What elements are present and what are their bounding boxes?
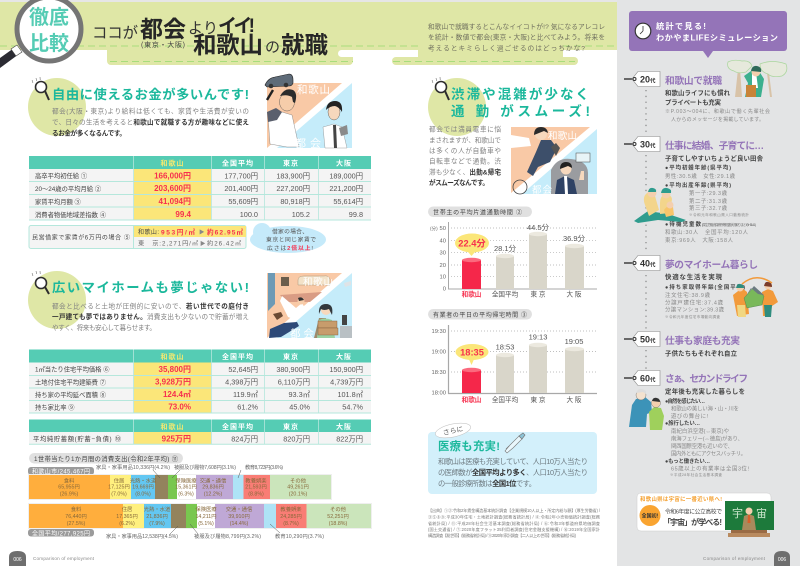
text block: 30s bbox=[665, 139, 764, 244]
bar chart: return home time: 18:00 bbox=[431, 390, 446, 396]
stacked bar: national average: 全国平均/277,925円 bbox=[32, 529, 90, 537]
stacked bar: national average: 76,440円 bbox=[65, 513, 87, 520]
illustration: person on phone with trees bbox=[728, 60, 787, 97]
bar chart: return home time bbox=[431, 325, 597, 404]
bar chart: commute time: 22.4分 bbox=[458, 238, 486, 248]
table: income and rent: 189,000円 bbox=[329, 172, 363, 180]
stacked bar: Wakayama city: 光熱・水道 bbox=[130, 476, 157, 484]
panel: space high school callout: 和歌山県は宇宙に一番近い県へ! bbox=[640, 495, 722, 503]
text block: 30s: 子育てしやすいちょうど良い田舎 bbox=[665, 154, 764, 162]
sidebar heading: 統計で見る! bbox=[656, 21, 706, 31]
stacked bar: Wakayama city: (20.1%) bbox=[289, 492, 308, 498]
footer: left page number: Comparison of employment bbox=[33, 556, 95, 561]
bar chart: commute time: (分) bbox=[430, 225, 438, 232]
stacked bar: national average: (27.5%) bbox=[67, 521, 86, 527]
panel: my home section heading bbox=[28, 271, 249, 329]
text block: 20s bbox=[665, 74, 770, 123]
table: housing: 119.9㎡ bbox=[233, 390, 259, 399]
bar chart: commute time: 10 bbox=[440, 274, 446, 280]
text block: 20s: 和歌山で就職 bbox=[665, 74, 722, 87]
table: housing: 大阪 bbox=[336, 352, 352, 361]
title: 和歌山 bbox=[193, 32, 263, 58]
stacked bar: national average: (7.9%) bbox=[149, 521, 165, 527]
table: income and rent: 消費者物価地域差指数 ④ bbox=[35, 210, 107, 219]
text block: 60s: 65歳以上の有業率は全国3位! bbox=[671, 464, 750, 472]
stacked bar: Wakayama city: 被服及び履物7,608円(3.1%) bbox=[174, 463, 236, 471]
text block: 60s: ●もっと働きたい… bbox=[665, 457, 710, 465]
bar chart: return home time: 東 京 bbox=[530, 395, 546, 404]
illustration: commute comparison bbox=[511, 127, 597, 196]
text block: commute: がスムーズなんです。 bbox=[429, 178, 489, 187]
table: income and rent: 大阪 bbox=[336, 158, 352, 168]
table: income and rent: 80,918円 bbox=[280, 197, 310, 206]
text block: 40s: 夢のマイホーム暮らし bbox=[665, 258, 758, 271]
table: net savings: 平均純貯蓄額(貯蓄−負債) ⑩ bbox=[33, 434, 122, 443]
stacked bar: national average: 保険医療 bbox=[195, 505, 217, 513]
table: income and rent: 99.8 bbox=[349, 210, 363, 219]
table: housing: 持ち家比率 ⑨ bbox=[35, 402, 75, 412]
panel: space high school callout: 全国初! bbox=[642, 512, 659, 520]
text block: my home bbox=[52, 302, 249, 332]
stacked bar: Wakayama city: 家具・家事用品10,336円(4.2%) bbox=[96, 463, 170, 471]
table: income and rent: 105.2 bbox=[292, 210, 310, 219]
stacked bar: national average: 教育10,290円(3.7%) bbox=[275, 532, 324, 540]
text block: 30s: ※令和元年和歌山県人口動態統計 bbox=[689, 212, 749, 217]
table: income and rent: 100.0 bbox=[240, 210, 258, 219]
stacked bar: Wakayama city: その他 bbox=[290, 476, 307, 484]
text block: 60s: ●自然を感じたい… bbox=[665, 397, 705, 405]
table: income and rent bbox=[29, 156, 371, 220]
bar chart: return home time: 大 阪 bbox=[566, 395, 582, 404]
panel: rent floor area comparison: 953円/㎡ bbox=[161, 228, 195, 236]
text block: sources bbox=[428, 507, 601, 538]
bar chart: commute time: 30 bbox=[440, 250, 446, 256]
table: housing: 和歌山 bbox=[160, 352, 184, 361]
stacked bar: Wakayama city: (26.9%) bbox=[60, 492, 79, 498]
intro text: 考えるとキミらしく過ごせるのはどっちかな? bbox=[428, 44, 585, 52]
panel: my home section heading: 広いマイホームも夢じゃない! bbox=[52, 280, 249, 295]
stacked bar: Wakayama city: (12.2%) bbox=[204, 492, 223, 498]
bar chart: return home time: 18:53 bbox=[496, 342, 514, 352]
text block: 30s: ●待機児童数 bbox=[665, 220, 702, 228]
footer: left page number bbox=[9, 551, 95, 566]
table: income and rent: 55,609円 bbox=[228, 197, 258, 206]
table: net savings: 大阪 bbox=[336, 422, 352, 431]
stacked bar: national average: 17,365円 bbox=[116, 513, 138, 520]
text block: 60s: 和歌山の美しい海・山・川を bbox=[671, 404, 739, 412]
stacked bar: Wakayama city: 17,125円 bbox=[108, 484, 130, 491]
panel: rent floor area comparison: 約26.42㎡ bbox=[207, 240, 242, 248]
title: ココが bbox=[92, 24, 138, 42]
illustration: money comparison: 都会 bbox=[295, 137, 321, 150]
text block: 30s: 和歌山:30人 全国平均:120人 bbox=[665, 228, 749, 236]
table: housing: 東京 bbox=[283, 352, 299, 361]
stacked bar: Wakayama city: 29,836円 bbox=[202, 484, 224, 491]
table: housing: 全国平均 bbox=[222, 352, 254, 361]
stacked bar: national average: 教養娯楽 bbox=[280, 505, 302, 513]
bar chart: commute time: 大 阪 bbox=[566, 290, 582, 298]
illustration: elderly couple bbox=[629, 389, 664, 430]
table: housing: 54.7% bbox=[342, 402, 363, 412]
table: net savings: 824万円 bbox=[231, 434, 258, 444]
illustration: family bbox=[634, 188, 686, 223]
text block: sources: 【出典】①②:令和2年賃金構造基本統計調査【企業規模10人以上・所定内給与額】(厚生労働省) / bbox=[428, 507, 601, 513]
text block: 20s: プライベートも充実 bbox=[665, 98, 722, 106]
panel: space high school callout: 宇 bbox=[732, 507, 743, 520]
age tag: 60代: 60代 bbox=[640, 374, 656, 384]
table: income and rent: 99.4 bbox=[175, 210, 192, 219]
table: income and rent: 55,614円 bbox=[333, 197, 363, 206]
bar chart: commute time: 36.9分 bbox=[563, 234, 586, 243]
sidebar heading: わかやまLIFEシミュレーション bbox=[656, 32, 778, 42]
stacked bar: Wakayama city: 19,669円 bbox=[132, 484, 154, 491]
panel: commute section heading: 渋滞や混雑が少なく bbox=[451, 86, 589, 102]
text block: my home: 一戸建ても夢ではありません。消費支出も少ないので貯蓄が増え bbox=[52, 312, 249, 321]
stacked bar: national average: 52,251円 bbox=[327, 513, 349, 520]
table: income and rent: 227,200円 bbox=[276, 184, 310, 193]
text block: commute: は多くの人が自動車や bbox=[429, 146, 501, 155]
text block: my home: やすく、将来も安心して暮らせます。 bbox=[52, 323, 156, 332]
table: housing: 61.2% bbox=[237, 402, 258, 412]
text block: 30s: 第一子:29.3歳 bbox=[689, 189, 728, 197]
panel: medical callout: の一般診療所数は全国1位です。 bbox=[438, 479, 536, 488]
stacked bar: Wakayama city: (7.0%) bbox=[111, 492, 127, 498]
stacked bar: Wakayama city: 65,955円 bbox=[58, 484, 80, 491]
stacked bar: national average: (18.8%) bbox=[329, 521, 348, 527]
title: イイ! bbox=[218, 16, 255, 37]
bar chart: commute time: 44.5分 bbox=[527, 223, 550, 232]
stacked bar: national average: (6.2%) bbox=[119, 521, 135, 527]
stacked bar: Wakayama city: 教養娯楽 bbox=[245, 476, 267, 484]
header band bbox=[0, 2, 623, 65]
text block: 30s: 仕事に結婚、子育てに… bbox=[665, 139, 764, 152]
title: (東京・大阪) bbox=[141, 40, 185, 49]
intro text: を統計・数値で都会(東京・大阪)と比べてみよう。将来を bbox=[428, 32, 605, 42]
panel: space high school callout: 令和6年度に公立高校で bbox=[665, 508, 722, 516]
bar chart: commute time: 20 bbox=[440, 263, 446, 269]
stacked bar: Wakayama city: 21,593円 bbox=[245, 484, 267, 491]
table: housing: 35,800円 bbox=[159, 365, 191, 374]
stacked bar: national average bbox=[28, 503, 372, 540]
illustration: homes comparison: 和歌山 bbox=[303, 277, 333, 288]
stacked bar: national average: (5.1%) bbox=[198, 521, 214, 527]
age tag: 40代 bbox=[624, 256, 660, 270]
illustration: money comparison bbox=[265, 74, 352, 150]
timeline dotted line bbox=[645, 90, 647, 370]
text block: free money bbox=[52, 106, 249, 138]
table: housing: 124.4㎡ bbox=[163, 390, 191, 399]
text block: 60s: 遊びの舞台に! bbox=[671, 412, 708, 420]
text block: free money: で、日々の生活を考えると和歌山で就職する方が趣味などに使え bbox=[52, 118, 249, 126]
bar chart: return home time: 和歌山 bbox=[462, 395, 481, 404]
panel: rent floor area comparison: ▶ bbox=[199, 229, 205, 236]
text block: 50s bbox=[665, 334, 740, 358]
footer: right page number bbox=[703, 551, 790, 566]
text block: 40s: 分譲戸建住宅:37.4歳 bbox=[665, 298, 724, 306]
callout: rent cloud bbox=[250, 223, 326, 253]
text block: 40s: 分譲マンション:39.3歳 bbox=[665, 306, 725, 314]
footer: right page number: Comparison of employment bbox=[703, 556, 766, 561]
illustration: commute comparison: 和歌山 bbox=[548, 131, 577, 142]
table: housing: 150,900円 bbox=[329, 365, 363, 374]
table: housing: 持ち家の平均延べ面積 ⑧ bbox=[35, 390, 107, 399]
panel: rent floor area comparison: 民営借家で家賃が6万円の場合 ⑤ bbox=[32, 234, 130, 242]
table: net savings: 820万円 bbox=[283, 434, 310, 444]
title: 都会 bbox=[140, 16, 186, 42]
text block: 40s: ●持ち家取得年齢(全国平均) bbox=[665, 283, 745, 291]
table: housing: 4,398万円 bbox=[225, 378, 258, 386]
icon: magnifier with 徹底比較 badge: 比較 bbox=[29, 32, 69, 55]
text block: free money: るお金が多くなるんです。 bbox=[52, 128, 126, 138]
illustration: homes comparison: 都会 bbox=[290, 327, 314, 340]
age tag: 20代: 20代 bbox=[640, 74, 656, 84]
text block: 60s bbox=[665, 373, 750, 477]
age tag: 40代: 40代 bbox=[640, 258, 656, 268]
text block: 60s: 南紀白浜空港(⇔東京)や bbox=[671, 427, 729, 435]
panel: free money section heading: 自由に使えるお金が多いんです! bbox=[52, 86, 249, 102]
stacked bar: national average: 被服及び履物8,799円(3.2%) bbox=[194, 532, 261, 540]
heading: return home time chart: 有業者の平日の平均帰宅時間 ③ bbox=[433, 311, 527, 319]
footer: left page number: 006 bbox=[13, 557, 22, 563]
table: housing: 4,739万円 bbox=[330, 378, 363, 386]
panel: medical callout: 和歌山は医療も充実していて、人口10万人当たり bbox=[438, 457, 588, 466]
text block: 20s: 和歌山ライフにも慣れ bbox=[665, 88, 731, 97]
table: housing: 73.0% bbox=[168, 402, 191, 412]
table: net savings: 全国平均 bbox=[222, 422, 254, 431]
text block: 40s: ※令和元年度住宅市場動向調査 bbox=[665, 314, 720, 319]
table: income and rent: 201,400円 bbox=[224, 184, 258, 193]
stacked bar: national average: 住居 bbox=[122, 505, 132, 513]
text block: sources: 構造調査【総世帯】(総務省統計局) / ⑪:2020年家計調査【二人以上の世帯】(総務省統計局) bbox=[428, 532, 577, 538]
table: net savings bbox=[29, 420, 371, 444]
bar chart: return home time: 19:13 bbox=[529, 332, 547, 342]
bar chart: commute time: 0 bbox=[443, 286, 446, 292]
panel: medical callout: 医療も充実! bbox=[438, 439, 500, 453]
table: income and rent: 家賃平均月額 ③ bbox=[35, 197, 82, 206]
panel: medical callout bbox=[428, 420, 597, 494]
illustration: homes comparison bbox=[267, 273, 352, 340]
stacked bar: national average: その他 bbox=[330, 505, 347, 513]
bar chart: return home time: 19:05 bbox=[565, 337, 583, 346]
panel: free money section heading bbox=[28, 77, 249, 136]
table: housing: 3,928万円 bbox=[155, 378, 191, 386]
bar chart: commute time: 全国平均 bbox=[492, 290, 519, 298]
text block: 60s: 国内外ともにアクセスバッチリ。 bbox=[671, 450, 746, 458]
bar chart: return home time: 19:30 bbox=[431, 329, 446, 335]
intro text: 和歌山で就職するとこんなイイコトが!? 気になるアレコレ bbox=[428, 22, 605, 31]
table: net savings: 925万円 bbox=[162, 434, 191, 444]
stacked bar: Wakayama city: (8.0%) bbox=[135, 492, 151, 498]
table: income and rent: 221,200円 bbox=[329, 184, 363, 193]
panel: commute section heading: 通 勤 がスムーズ! bbox=[451, 103, 590, 119]
illustration: commute comparison: 都会 bbox=[532, 184, 552, 196]
text block: 50s: 子供たちもそれぞれ自立 bbox=[665, 348, 738, 358]
panel: rent floor area comparison: 約62.95㎡ bbox=[207, 228, 243, 236]
text block: 60s: 関西国際空港も近いので、 bbox=[671, 442, 733, 450]
stacked bar: national average: 39,910円 bbox=[228, 513, 250, 520]
heading: commute time chart: 世帯主の平均片道通勤時間 ② bbox=[433, 208, 522, 216]
text block: sources: ③⑤⑧⑨:平成30年住宅・土地統計調査(総務省統計局) / ④:令和2年小売物価統計調査(総務 bbox=[428, 514, 600, 520]
text block: 60s: ●旅行したい… bbox=[665, 419, 700, 427]
text block: 40s: 注文住宅:38.9歳 bbox=[665, 291, 711, 299]
table: housing bbox=[29, 350, 371, 414]
panel: rent floor area comparison: 東 京:2,271円/㎡ bbox=[138, 240, 199, 248]
stacked bar: national average: 21,836円 bbox=[146, 513, 168, 520]
stacked bar: national average: 家具・家事用品12,538円(4.5%) bbox=[106, 532, 178, 540]
age tag: 60代 bbox=[624, 370, 660, 386]
bar chart: commute time: 東 京 bbox=[530, 290, 546, 298]
table: income and rent: 高卒平均初任給 ① bbox=[35, 171, 88, 180]
callout: rent cloud: 広さは2倍以上! bbox=[267, 244, 313, 252]
icon: magnifier with 徹底比較 badge bbox=[0, 0, 81, 68]
table: housing: 101.8㎡ bbox=[337, 390, 364, 399]
panel: rent floor area comparison: ▶ bbox=[200, 240, 206, 248]
stacked bar: national average: (8.7%) bbox=[283, 521, 299, 527]
icon: magnifier with 徹底比較 badge: 徹底 bbox=[29, 6, 69, 29]
table: housing: 380,900円 bbox=[276, 365, 310, 374]
table: net savings: 東京 bbox=[283, 422, 299, 431]
title: より bbox=[188, 20, 218, 37]
stacked bar: Wakayama city: (6.3%) bbox=[178, 492, 194, 498]
stacked bar: national average: 交通・通信 bbox=[226, 505, 253, 513]
text block: 30s: 男性:30.5歳 女性:29.1歳 bbox=[665, 172, 736, 180]
bar chart: commute time bbox=[430, 222, 597, 298]
stacked bar: national average: 食料 bbox=[71, 505, 82, 513]
heading: commute time chart bbox=[428, 206, 532, 217]
stacked bar: national average: 光熱・水道 bbox=[144, 505, 171, 513]
table: net savings: 822万円 bbox=[336, 434, 363, 444]
panel: rent floor area comparison: 和歌山: bbox=[138, 228, 159, 236]
table: income and rent: 166,000円 bbox=[154, 172, 191, 180]
text block: my home: 都会と比べると土地が圧倒的に安いので、若い世代での庭付き bbox=[52, 302, 249, 310]
table: housing: 45.0% bbox=[289, 402, 310, 412]
table: housing: 52,645円 bbox=[228, 365, 258, 374]
stacked bar: Wakayama city: 交通・通信 bbox=[200, 476, 227, 484]
table: income and rent: 177,700円 bbox=[224, 172, 258, 180]
table: income and rent: 和歌山 bbox=[160, 158, 184, 168]
heading: household spending bbox=[29, 453, 183, 464]
age tag: 50代: 50代 bbox=[640, 334, 656, 344]
intro text bbox=[428, 22, 605, 52]
table: income and rent: 203,600円 bbox=[154, 184, 191, 193]
table: income and rent: 東京 bbox=[283, 158, 299, 168]
panel: commute section heading bbox=[428, 77, 590, 136]
stacked bar: Wakayama city: 和歌山市/245,467円 bbox=[32, 468, 90, 476]
text block: commute: 自転車などで通勤。渋 bbox=[429, 156, 501, 166]
table: net savings: 和歌山 bbox=[160, 422, 184, 431]
stacked bar: Wakayama city: 15,361円 bbox=[175, 484, 197, 491]
text block: 30s: ●平均出産年齢(県平均) bbox=[665, 181, 731, 189]
text block: 40s bbox=[665, 258, 758, 319]
heading: return home time chart bbox=[428, 309, 532, 320]
text block: 30s: 第三子:32.7歳 bbox=[689, 204, 728, 212]
text block: commute: 滞も少なく、出勤&帰宅 bbox=[429, 168, 501, 176]
text block: 30s: ●平均初婚年齢(県平均) bbox=[665, 164, 731, 172]
stacked bar: national average: 24,285円 bbox=[280, 513, 302, 520]
text block: 30s: (厚生労働省保育所等関連状況取りまとめH31.4.1) bbox=[702, 222, 756, 227]
text block: 60s: ※平成28年社会生活基本調査 bbox=[670, 472, 722, 477]
panel: space high school callout bbox=[637, 493, 774, 537]
text block: 20s: 人からのメッセージを掲載しています。 bbox=[671, 116, 764, 123]
text block: free money: 都会(大阪・東京)より給料は低くても、家賃や生活費が安いの bbox=[52, 106, 249, 116]
table: housing: 土地付住宅平均建築費 ⑦ bbox=[35, 378, 107, 386]
table: income and rent: 20〜24歳の平均月給 ② bbox=[35, 184, 102, 193]
illustration: money comparison: 和歌山 bbox=[297, 84, 330, 96]
panel: medical callout: さらに bbox=[442, 425, 464, 437]
text block: 30s: 東京:969人 大阪:158人 bbox=[665, 236, 734, 244]
text block: 60s: 定年後も充実した暮らしを bbox=[665, 386, 745, 396]
bar chart: commute time: 和歌山 bbox=[462, 290, 481, 298]
stacked bar: Wakayama city: 食料 bbox=[64, 476, 75, 484]
text block: 60s: さぁ、セカンドライフ bbox=[665, 373, 748, 385]
table: income and rent: 41,094円 bbox=[159, 197, 191, 206]
stacked bar: Wakayama city: (8.8%) bbox=[248, 492, 264, 498]
age tag: 50代 bbox=[624, 332, 660, 346]
table: housing: 93.3㎡ bbox=[288, 390, 311, 399]
stacked bar: national average: (14.4%) bbox=[230, 521, 249, 527]
table: income and rent: 183,900円 bbox=[276, 172, 310, 180]
text block: commute: まされますが、和歌山で bbox=[429, 136, 501, 144]
footer: right page number: 006 bbox=[778, 557, 786, 563]
table: income and rent: 全国平均 bbox=[222, 158, 254, 168]
stacked bar: Wakayama city: 保険医療 bbox=[175, 476, 197, 484]
bar chart: commute time: 40 bbox=[440, 238, 446, 244]
illustration: couple holding house bbox=[733, 278, 778, 317]
text block: 60s: 南海フェリー(⇔徳島)があり、 bbox=[671, 434, 743, 442]
table: housing: 1㎡当たり住宅平均価格 ⑥ bbox=[35, 364, 110, 374]
panel: sidebar background bbox=[617, 0, 800, 566]
panel: space high school callout: 「宇宙」が学べる! bbox=[663, 517, 722, 527]
panel: rent floor area comparison bbox=[29, 226, 246, 248]
text block: 40s: 快適な生活を実現 bbox=[665, 272, 723, 281]
stacked bar: Wakayama city: 49,261円 bbox=[287, 484, 309, 491]
text block: 50s: 仕事も家庭も充実 bbox=[665, 334, 740, 347]
stacked bar: Wakayama city: 教育8,723円(3.6%) bbox=[245, 463, 283, 471]
text block: sources: (国土交通省) / ⑦:2020年度フラット35利用者調査(住宅金融支援機構) / ⑩:2019年全国家計 bbox=[428, 526, 600, 532]
bar chart: return home time: 19:00 bbox=[431, 350, 446, 356]
panel: space high school callout: 宙 bbox=[756, 507, 767, 520]
age tag: 30代: 30代 bbox=[640, 140, 656, 150]
bar chart: commute time: 28.1分 bbox=[494, 244, 517, 253]
text block: 20s: ※P.003〜004に、和歌山で働く先輩社会 bbox=[665, 108, 770, 115]
stacked bar: national average: 14,211円 bbox=[195, 513, 217, 520]
stacked bar: Wakayama city bbox=[28, 463, 332, 500]
title: 就職 bbox=[281, 32, 328, 58]
callout: rent cloud: 東京と同じ家賃で bbox=[266, 236, 316, 244]
sidebar heading bbox=[629, 11, 787, 58]
age tag: 20代 bbox=[624, 72, 660, 86]
bar chart: commute time: 50 bbox=[440, 226, 446, 232]
bar chart: return home time: 18:30 bbox=[431, 370, 446, 376]
text block: 30s: 第二子:31.3歳 bbox=[689, 197, 728, 205]
bar chart: return home time: 全国平均 bbox=[492, 395, 519, 404]
text block: commute bbox=[429, 124, 501, 187]
panel: medical callout: の医師数が全国平均より多く、人口10万人当たり bbox=[438, 468, 588, 477]
heading: household spending: 1世帯当たり1か月間の消費支出(令和2年平均) ⑪ bbox=[34, 454, 179, 463]
text block: commute: 都会では満員電車に悩 bbox=[429, 124, 501, 134]
title: の bbox=[265, 39, 280, 56]
callout: rent cloud: 借家の場合、 bbox=[272, 228, 308, 236]
table: housing: 6,110万円 bbox=[278, 378, 310, 386]
text block: sources: 省統計局) / ⑪:平成28年社会生活基本調査(総務省統計局) / ⑥:令和3年都道府県地価調査 bbox=[428, 520, 600, 526]
title bbox=[92, 16, 328, 58]
age tag: 30代 bbox=[624, 136, 660, 152]
stacked bar: Wakayama city: 住居 bbox=[114, 476, 124, 484]
bar chart: return home time: 18:35 bbox=[460, 348, 484, 358]
